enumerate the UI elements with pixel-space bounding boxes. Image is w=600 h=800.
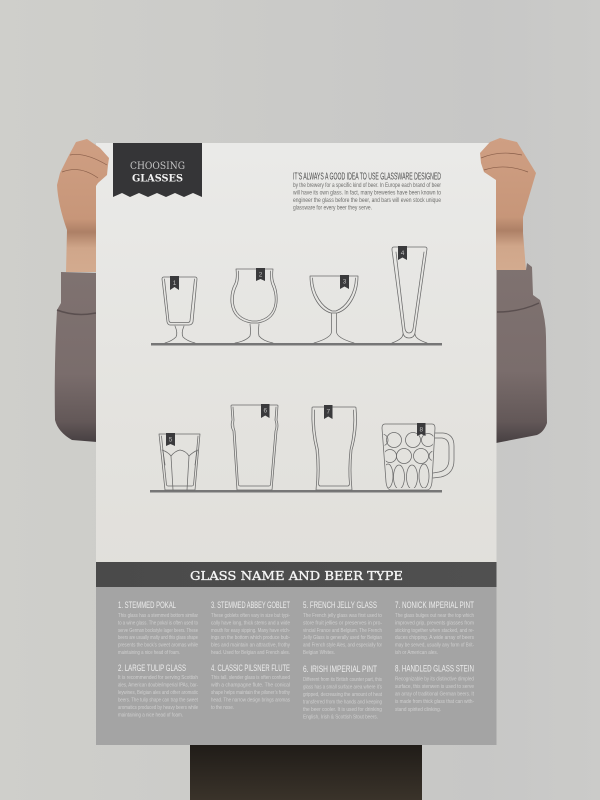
column 4 — [395, 600, 474, 713]
entry 4 body: with a champagne flute. The conical — [210, 682, 290, 688]
glass 2: large tulip — [231, 269, 277, 343]
entry 4 body: shape helps maintain the pilsner’s frothy — [211, 690, 290, 696]
glass 3: stemmed abbey goblet — [310, 276, 358, 343]
intro body: engineer the glass before the beer, and bars will even stock unique — [293, 198, 442, 204]
entry 8 body: surface, this stenwen is used to serve — [395, 684, 474, 690]
entry 4 body: This tall, slender glass is often confused — [211, 675, 290, 681]
entry 1 heading: 1. STEMMED POKAL — [118, 600, 176, 611]
entry 2 body: It is recommended for serving Scottish — [118, 675, 198, 681]
glass 8: handled glass stein — [376, 424, 454, 490]
ribbon 4: 4 — [401, 250, 405, 257]
ribbon 5: 5 — [169, 436, 173, 444]
entry 7 body: ish or American ales. — [395, 650, 438, 656]
intro body — [292, 183, 442, 212]
banner: glass name and beer type — [96, 562, 496, 587]
banner: glass name and beer type: GLASS NAME AND BEER TYPE — [190, 568, 403, 583]
entry 7 body: may be served, usually any form of Brit- — [395, 642, 474, 648]
entry 3 body: mouth for easy sipping. Many have etch- — [211, 628, 290, 634]
ribbon 6 — [261, 404, 270, 418]
column 3 — [303, 600, 382, 720]
entry 7 body: The glass bulges out near the top which — [395, 613, 474, 619]
entry 1 body: maintaining a nice head of foam. — [118, 650, 180, 656]
ribbon 3 — [340, 275, 349, 289]
entry 8 body: stand spirited clinking. — [395, 707, 441, 713]
entry 8 body: is made from thick glass that can with- — [395, 699, 474, 705]
title badge — [113, 143, 202, 197]
person: trousers — [190, 745, 422, 800]
entry 8 body — [395, 676, 474, 713]
entry 5 body: and French style Ales, and especially for — [303, 642, 382, 648]
entry 6 heading: 6. IRISH IMPERIAL PINT — [303, 664, 377, 675]
glass 1: stemmed pokal — [162, 277, 197, 343]
entry 8 body: Recognizable by its distinctive dimpled — [395, 676, 474, 682]
left sleeve — [55, 272, 97, 442]
ribbon 1: 1 — [173, 280, 177, 287]
entry 6 body: glass has a small surface area where it’s — [303, 684, 382, 690]
glass 7: nonick imperial pint — [312, 407, 356, 490]
intro body: by the brewery for a specific kind of beer. In Europe each brand of beer — [293, 183, 441, 189]
entry 6 body: English, Irish & Scottish Stout beers. — [303, 714, 378, 720]
entry 7 body: duces chipping. A wide array of beers — [395, 635, 474, 641]
entry 1 body: presents the bock’s sweet aromas while — [118, 642, 198, 648]
badge title: choosing: CHOOSING — [130, 161, 185, 172]
column 1 — [118, 600, 198, 718]
entry 2 body: beers. The tulip shape can trap the sweet — [118, 698, 198, 704]
right sleeve — [496, 263, 547, 443]
bottom shelf — [150, 490, 442, 492]
ribbon 2 — [256, 268, 265, 281]
ribbon 1 — [170, 276, 179, 290]
entry 2 body: aromatics produced by heavy beers while — [118, 705, 198, 711]
entry 7 body: improved grip, prevents glasses from — [395, 620, 474, 626]
intro body: glassware for every beer they serve. — [293, 206, 372, 212]
entry 4 body: to the nose. — [211, 705, 234, 711]
glass 6: irish imperial pint — [231, 405, 278, 490]
ribbon 6: 6 — [263, 408, 267, 414]
entry 6 body: transferred from the hands and keeping — [303, 700, 382, 706]
ribbon 7: 7 — [326, 408, 330, 416]
entry 1 body: beers are usually malty and this glass shape — [118, 635, 198, 641]
entry 2 body: leywines, Belgian ales and other aromatic — [118, 690, 198, 696]
intro text — [292, 170, 442, 212]
entry 5 body: Belgian Whites. — [303, 650, 335, 656]
entry 1 body: serve German bockstyle lager beers. These — [118, 628, 198, 634]
ribbon 4 — [398, 246, 407, 260]
entry 8 heading: 8. HANDLED GLASS STEIN — [395, 664, 474, 674]
ribbon 7 — [324, 405, 332, 419]
intro body: will have its own glass. In fact, many breweries have been known to — [292, 191, 442, 197]
ribbon 8: 8 — [419, 426, 423, 434]
entry 1 body: This glass has a stemmed bottom similar — [118, 613, 198, 619]
ribbon 3: 3 — [343, 278, 347, 286]
right hand and forearm — [480, 138, 536, 270]
left hand and forearm — [57, 139, 109, 272]
glass 5: french jelly glass — [159, 434, 200, 490]
entry 6 body: gripped, decreasing the amount of heat — [303, 692, 382, 698]
entry 6 body: the beer cooler. It is used for drinking — [303, 707, 382, 713]
entry 1 body — [118, 613, 198, 656]
column 2 — [210, 600, 290, 711]
entry 3 heading: 3. STEMMED ABBEY GOBLET — [211, 600, 290, 611]
glass 4: classic pilsner flute — [392, 247, 427, 343]
badge title: glasses: GLASSES — [132, 174, 183, 184]
descriptions panel — [96, 587, 496, 745]
poster photo scene — [54, 138, 547, 800]
poster photo scene: IT’S ALWAYS A GOOD IDEA TO USE GLASSWARE DESIGNED — [293, 170, 441, 182]
entry 8 body: an array of traditional German beers. It — [395, 692, 474, 698]
entry 7 heading: 7. NONICK IMPERIAL PINT — [395, 600, 474, 611]
entry 3 body: ings on the bottom which produce bub- — [211, 635, 290, 641]
entry 5 body: The French jelly glass was first used to — [303, 613, 382, 619]
entry 4 body: head. The narrow design brings aromas — [211, 698, 290, 704]
entry 1 body: to a wine glass. The pokal is often used to — [118, 620, 198, 626]
entry 3 body: These goblets often vary in size but typi- — [211, 613, 290, 619]
ribbon 2: 2 — [259, 272, 263, 278]
ribbon 5 — [166, 433, 175, 446]
entry 5 body — [303, 613, 382, 656]
entry 2 heading: 2. LARGE TULIP GLASS — [118, 663, 186, 674]
entry 6 body: Different from its British counter part, this — [303, 677, 382, 683]
entry 5 body: vincial France and Belgium. The French — [303, 628, 382, 634]
poster sheet — [96, 143, 496, 745]
ribbon 8 — [417, 423, 426, 436]
entry 4 body — [210, 675, 290, 711]
entry 7 body: sticking together when stacked, and re- — [395, 628, 474, 634]
entry 2 body: maintaining a nice head of foam. — [118, 712, 183, 718]
entry 2 body — [118, 675, 198, 718]
entry 7 body — [395, 613, 474, 656]
entry 4 heading: 4. CLASSIC PILSNER FLUTE — [211, 663, 290, 674]
entry 5 body: Jelly Glass is generally used for Belgian — [303, 635, 382, 641]
entry 2 body: ales, American double/imperial IPAs, bar- — [118, 682, 198, 688]
entry 3 body: bles and maintain an attractive, frothy — [211, 642, 290, 648]
entry 3 body: cally have long, thick stems and a wide — [211, 620, 290, 626]
entry 5 body: store fruit jellies or preserves in pro- — [303, 620, 382, 626]
entry 3 body: head. Used for Belgian and French ales. — [211, 650, 290, 656]
entry 6 body — [303, 677, 382, 720]
entry 3 body — [211, 613, 290, 656]
entry 5 heading: 5. FRENCH JELLY GLASS — [303, 600, 377, 611]
top shelf — [151, 343, 442, 346]
